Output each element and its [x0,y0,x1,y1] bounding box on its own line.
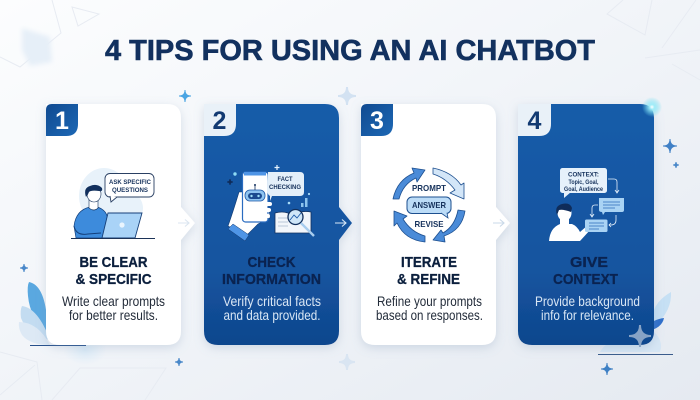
icon: phone with robot and fact checking: FACT [278,176,293,183]
icon: person at laptop with question bubble [71,168,155,239]
number badge 1 [46,104,78,136]
card with pointer [46,104,195,345]
description: and data provided. [224,308,320,323]
heading: CONTEXT [553,272,618,288]
number badge 2 [204,104,236,136]
card with pointer [361,104,510,345]
heading [76,255,152,288]
description: info for relevance. [541,308,634,323]
heading [397,255,460,288]
panel: tip 2 [204,104,352,345]
icon: iterate cycle: REVISE [414,219,444,229]
description [376,294,483,323]
icon: person at laptop with question bubble: ASK SPECIFIC [109,179,151,186]
icon: iterate cycle [393,168,465,242]
heading [553,255,618,288]
icon: arrow [493,220,504,226]
number badge 3: 3 [370,107,384,135]
panel: tip 1 [46,104,195,345]
heading: CHECK [248,255,296,271]
icon: person giving context [549,168,624,241]
decorative star on card corner [629,325,651,347]
heading: ITERATE [401,255,457,271]
icon: phone with robot and fact checking: CHECKING [269,184,301,191]
icon: iterate cycle: ANSWER [412,200,446,210]
card [518,104,654,345]
title: 4 TIPS FOR USING AN AI CHATBOT [105,35,596,67]
icon: arrow [178,220,189,226]
description: Provide background [535,294,640,309]
number badge 4: 4 [528,107,542,135]
decorative pale hexagon [22,28,52,66]
heading: GIVE [570,255,608,271]
icon: person giving context: CONTEXT: [568,172,599,178]
icon: person giving context: Topic, Goal, [568,179,599,186]
panel: tip 3 [361,104,510,345]
heading: & SPECIFIC [76,272,152,288]
heading: INFORMATION [222,272,321,288]
icon: iterate cycle: PROMPT [412,183,447,193]
heading [222,255,321,288]
heading: BE CLEAR [80,255,148,271]
icon: person at laptop with question bubble: QUESTIONS [112,187,149,194]
number badge 4 [518,104,551,136]
decorative leaves right [598,292,673,355]
number badge 1: 1 [55,107,69,135]
description: Verify critical facts [223,294,321,309]
description [535,294,640,323]
icon: arrow [335,220,346,226]
heading: & REFINE [397,272,460,288]
description: Write clear prompts [62,294,165,309]
decorative glow on card corner [642,97,662,117]
description: for better results. [69,308,158,323]
decorative leaves left [19,282,107,365]
card with pointer [204,104,352,345]
icon: person giving context: Goal, Audience [564,186,603,193]
number badge 3 [361,104,393,136]
description: Refine your prompts [377,294,482,309]
icon: phone with robot and fact checking [227,165,314,241]
panel: tip 4 [518,97,662,347]
sparkles around cards [20,87,679,375]
description [62,294,165,323]
number badge 2: 2 [213,107,226,135]
description: based on responses. [376,308,483,323]
description [223,294,321,323]
